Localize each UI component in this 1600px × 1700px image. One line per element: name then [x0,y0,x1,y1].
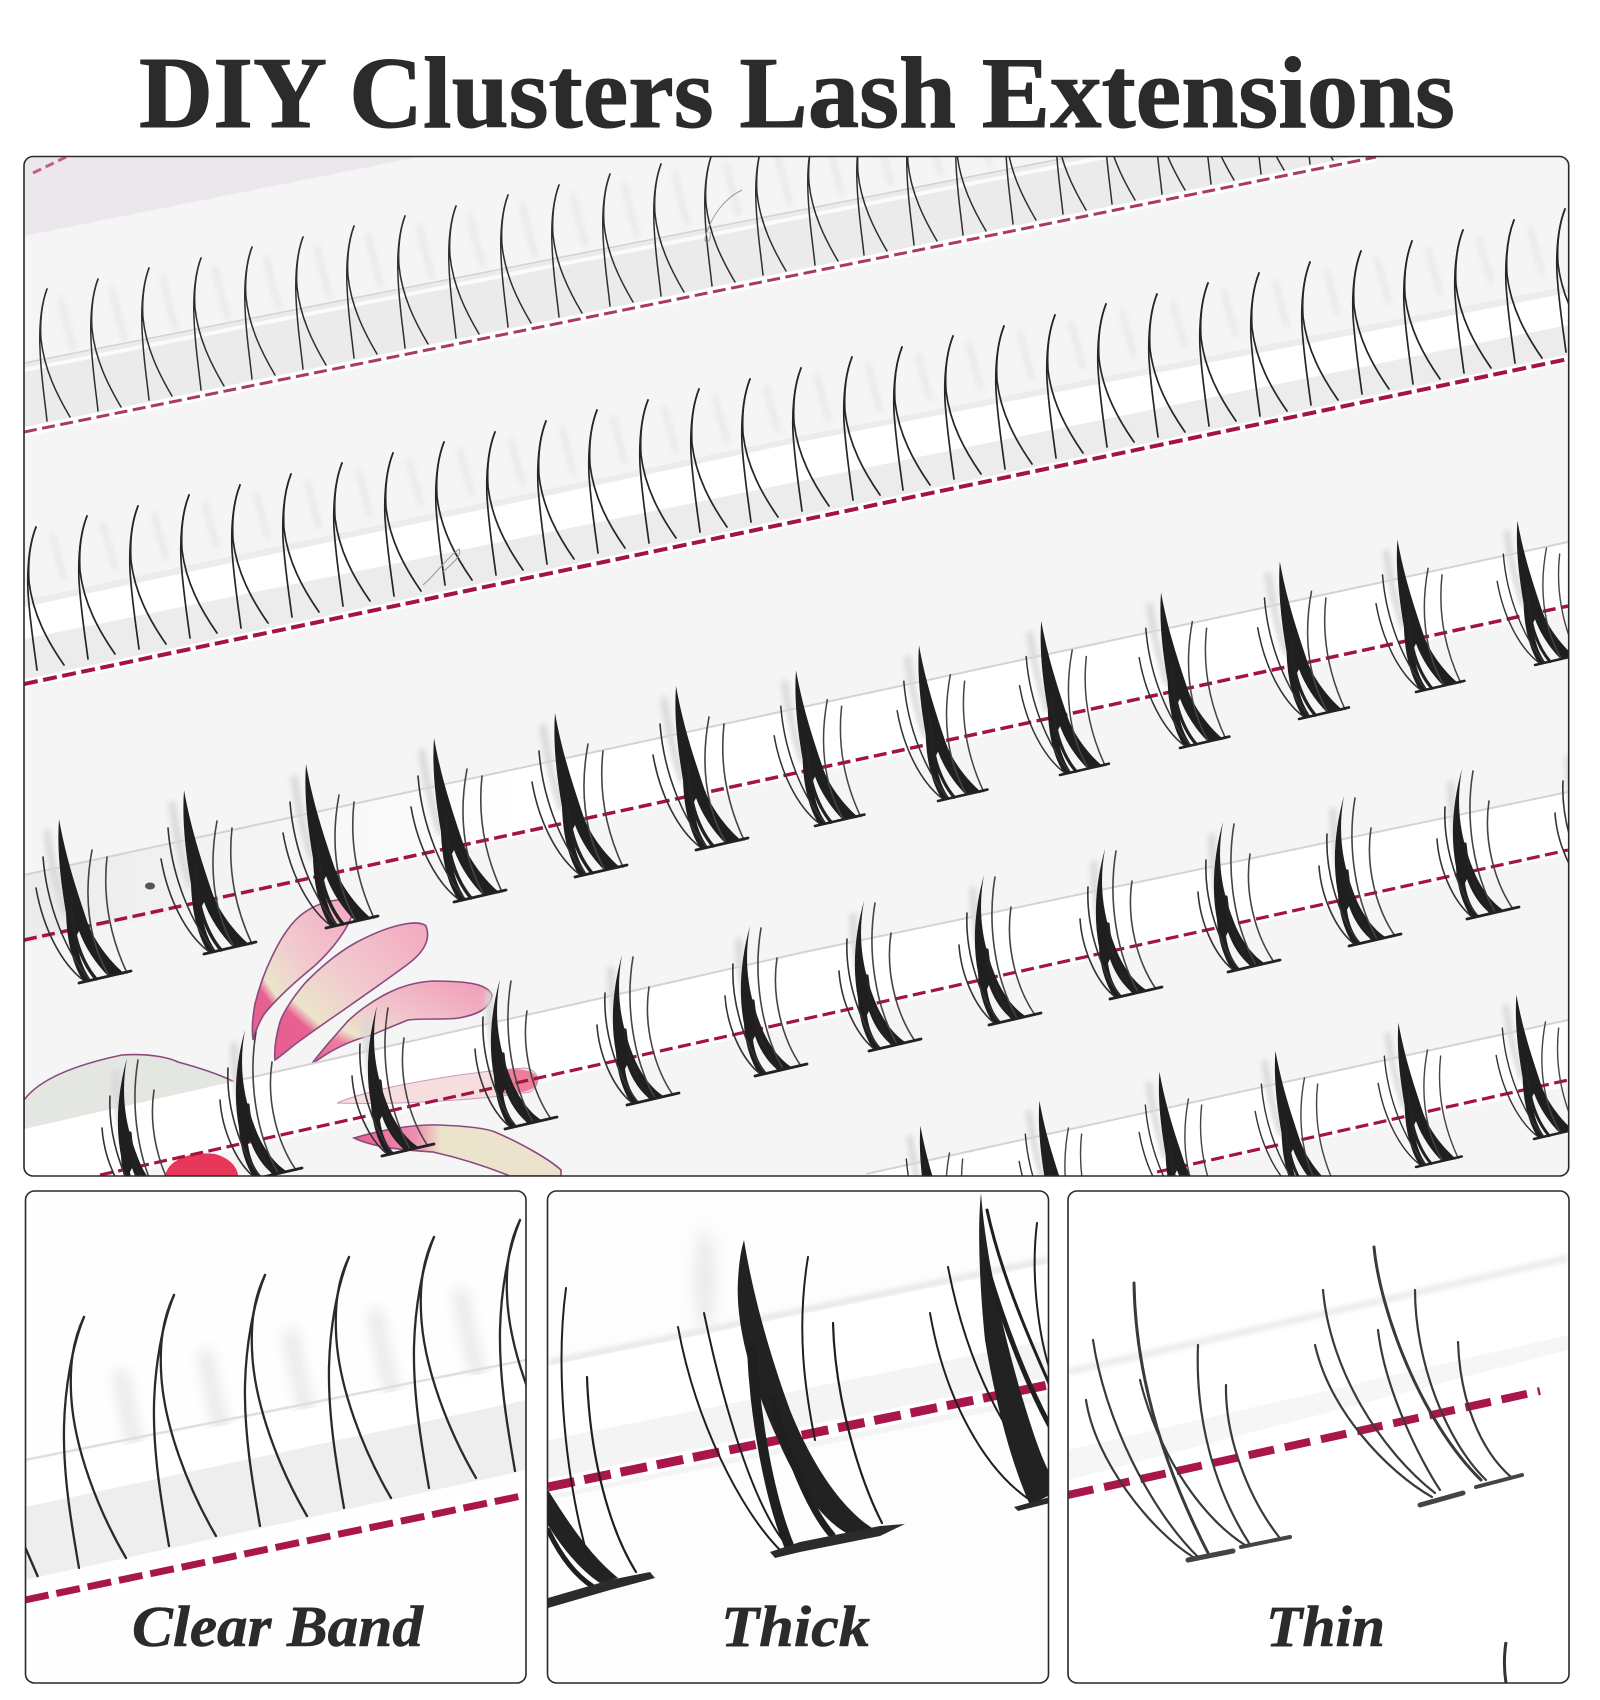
backing band [25,1360,526,1580]
strip 3 backing band [24,542,1568,944]
panel: thick [547,1191,1060,1683]
strip 4 backing band [24,792,1568,1200]
panel: clear band [25,1191,562,1683]
row 1: clear band lashes [39,157,1334,422]
main panel border [24,156,1569,1176]
thick cluster right [930,1193,1060,1511]
thin cluster right [1315,1247,1522,1505]
lashes [25,1220,562,1577]
label: thin: Thin [1266,1594,1385,1659]
backing band [548,1230,1048,1500]
clear band border [26,1191,526,1683]
row 5: cluster lashes [906,994,1568,1176]
panel: main lash tray photo [23,156,1570,1177]
red dashed line [1068,1391,1540,1495]
red dashed lines [24,157,1568,1175]
label: thick: Thick [721,1594,870,1659]
panel: thin [1068,1191,1570,1683]
row 2: clear band lashes [28,209,1593,670]
backing band [1068,1258,1568,1480]
thin cluster left [1086,1283,1290,1560]
title: DIY Clusters Lash Extensions [139,37,1455,150]
lash shadows [113,1290,488,1444]
red dashed line [548,1385,1048,1487]
thin border [1068,1191,1569,1683]
thick cluster left [548,1288,655,1608]
row 3: cluster lashes [36,521,1581,983]
thick border [548,1191,1048,1683]
row 4: cluster lashes [102,743,1600,1208]
red dashed line [25,1495,526,1600]
strip 1 backing band [24,157,1376,436]
strip 2 backing band [24,286,1568,684]
strip 5 backing band [866,1020,1568,1180]
flower petals [24,900,561,1176]
tray corner tint [24,156,423,236]
thick cluster centre [678,1240,905,1558]
stray lash tip [1504,1642,1506,1683]
label: clear band: Clear Band [132,1594,424,1659]
